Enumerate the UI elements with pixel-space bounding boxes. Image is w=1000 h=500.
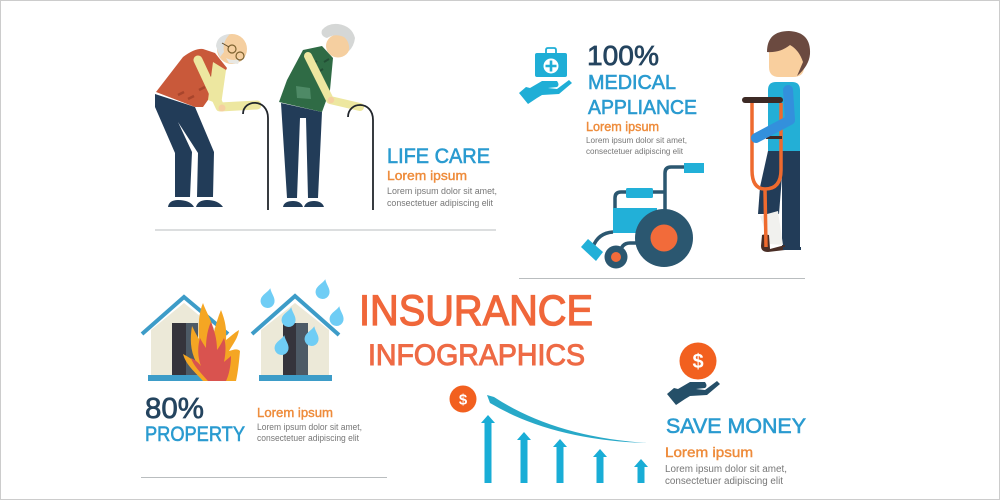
arrow: falling cost curve (487, 395, 647, 443)
heading: medical appliance: APPLIANCE (588, 97, 697, 119)
statistic: 80%: 80% (145, 393, 204, 425)
text block: property: Lorem ipsum dolor sit amet, (257, 422, 362, 432)
panel: save money (450, 342, 806, 487)
icon: small dollar coin: $ (459, 392, 468, 408)
text block: medical: Lorem ipsum dolor sit amet, (586, 135, 687, 145)
panel: life care (155, 24, 497, 210)
panel: medical appliance (519, 31, 810, 268)
subheading: life care: Lorem ipsum (387, 168, 467, 183)
title: insurance infographics: INSURANCE (359, 287, 593, 335)
heading: medical appliance: MEDICAL (588, 72, 676, 94)
text block: save money: consectetuer adipiscing elit (665, 476, 783, 487)
chart: declining arrows (481, 415, 648, 483)
icon: medical kit in hand (519, 48, 572, 104)
subheading: medical: Lorem ipsum (586, 119, 659, 134)
illustration: burning house (142, 297, 240, 381)
statistic: 100%: 100% (587, 40, 659, 71)
icon: coin above hand (667, 342, 720, 405)
subheading: save money: Lorem ipsum (665, 444, 753, 460)
icon: small dollar coin (450, 386, 476, 412)
text block: medical: consectetuer adipiscing elit (586, 146, 684, 156)
icon: coin above hand: $ (692, 351, 704, 373)
text block: life care: Lorem ipsum dolor sit amet, (387, 186, 497, 196)
illustration: elderly woman with cane (279, 24, 373, 210)
text block: property: consectetuer adipiscing elit (257, 433, 360, 443)
title: insurance infographics: INFOGRAPHICS (368, 339, 585, 372)
heading: save money: SAVE MONEY (666, 415, 806, 438)
illustration: elderly man with cane (155, 34, 268, 210)
heading: property: PROPERTY (145, 423, 245, 446)
subheading: property: Lorem ipsum (257, 405, 333, 420)
illustration: flooded house (252, 278, 346, 381)
illustration: wheelchair (581, 163, 704, 268)
panel: property (142, 278, 362, 446)
illustration: person on crutches (742, 31, 810, 252)
title: insurance infographics (359, 287, 593, 372)
text block: life care: consectetuer adipiscing elit (387, 198, 493, 208)
text block: save money: Lorem ipsum dolor sit amet, (665, 464, 787, 475)
heading: life care: LIFE CARE (387, 145, 490, 168)
